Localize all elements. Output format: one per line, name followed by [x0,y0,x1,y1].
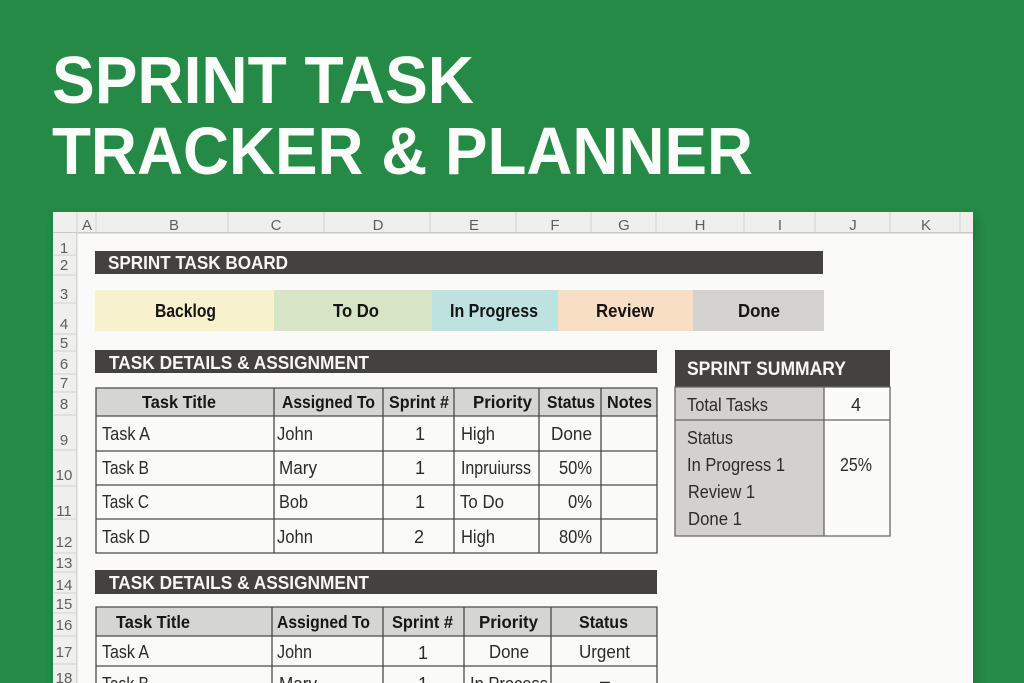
panel: sprint summary: 4 [851,395,861,415]
title: TRACKER & PLANNER [52,114,753,189]
task table two: Done [489,642,529,662]
task table one: 80% [559,527,592,547]
column headers: E [469,217,479,234]
column headers: B [169,217,179,234]
task table one: Mary [279,458,317,478]
column headers [53,212,973,234]
row headers: 10 [56,467,72,484]
task table one: Task Title [142,392,216,412]
task table one: High [461,424,495,444]
task table one: Bob [279,492,308,512]
column headers: J [849,217,857,234]
task table one: John [277,424,313,444]
task table one: Sprint # [389,392,449,412]
kanban status columns: In Progress [450,301,538,321]
kanban status columns: Backlog [155,301,216,321]
kanban status columns [95,290,824,331]
row headers [53,233,78,683]
heading: sprint task board: SPRINT TASK BOARD [108,253,288,273]
heading: task details and assignment: TASK DETAILS & ASSIGNMENT [109,353,369,373]
task table two: Urgent [579,642,630,662]
task table one: Notes [607,392,652,412]
task table one: Done [551,424,592,444]
title: SPRINT TASK [52,43,474,118]
row headers: 1 [60,240,68,257]
row headers: 11 [56,503,72,520]
row headers: 6 [60,356,68,373]
row headers: 14 [56,577,72,594]
task table one: Assigned To [282,392,375,412]
row headers: 9 [60,432,68,449]
task table one: 0% [568,492,592,512]
heading: task details and assignment [95,350,657,373]
row headers: 3 [60,286,68,303]
task table one: Task C [102,492,149,512]
task table one: Inpruiurss [461,458,531,478]
task table two: 1 [418,643,428,663]
task table one: Task A [102,424,150,444]
task table one: 50% [559,458,592,478]
row headers: 16 [56,617,72,634]
task table one: Priority [473,392,532,412]
column headers: A [82,217,92,234]
task table one: 1 [415,458,425,478]
task table two: Task Title [116,612,190,632]
row headers: 12 [56,534,72,551]
panel: sprint summary: Total Tasks [687,395,768,415]
task table one: High [461,527,495,547]
task table one [96,388,657,553]
task table one: 2 [414,527,424,547]
heading: sprint task board [95,251,823,274]
kanban status columns: Review [596,301,655,321]
panel: sprint summary: Done 1 [688,509,742,529]
task table two: Priority [479,612,538,632]
task table two: Assigned To [277,612,370,632]
row headers: 15 [56,596,72,613]
title [52,43,753,189]
row headers: 17 [56,644,72,661]
spreadsheet sheet [53,212,973,683]
heading: second task details: TASK DETAILS & ASSIGNMENT [109,573,369,593]
task table one: John [277,527,313,547]
column headers: C [271,217,282,234]
kanban status columns: To Do [333,301,379,321]
task table two [96,607,657,683]
row headers: 2 [60,257,68,274]
panel: sprint summary: Status [687,428,733,448]
kanban status columns: Done [738,301,780,321]
column headers: D [373,217,384,234]
column headers: I [778,217,782,234]
task table two: Status [579,612,628,632]
row headers: 7 [60,375,68,392]
task table one: Task B [102,458,149,478]
task table two: Sprint # [392,612,453,632]
row headers: 4 [60,316,68,333]
task table one: To Do [460,492,504,512]
task table one: Task D [102,527,150,547]
task table one: Status [547,392,595,412]
column headers: F [550,217,560,234]
task table one: 1 [415,492,425,512]
row headers: 8 [60,396,68,413]
column headers: G [618,217,630,234]
panel: sprint summary: In Progress 1 [687,455,785,475]
panel: sprint summary [675,350,890,536]
row headers: 5 [60,335,68,352]
panel: sprint summary: 25% [840,455,872,475]
task table two: John [277,642,312,662]
panel: sprint summary: Review 1 [688,482,755,502]
heading: second task details [95,570,657,594]
task table one: 1 [415,424,425,444]
row headers: 13 [56,555,72,572]
panel: sprint summary: SPRINT SUMMARY [687,359,846,380]
column headers: H [695,217,705,234]
task table two: Task A [102,642,149,662]
column headers: K [921,217,931,234]
